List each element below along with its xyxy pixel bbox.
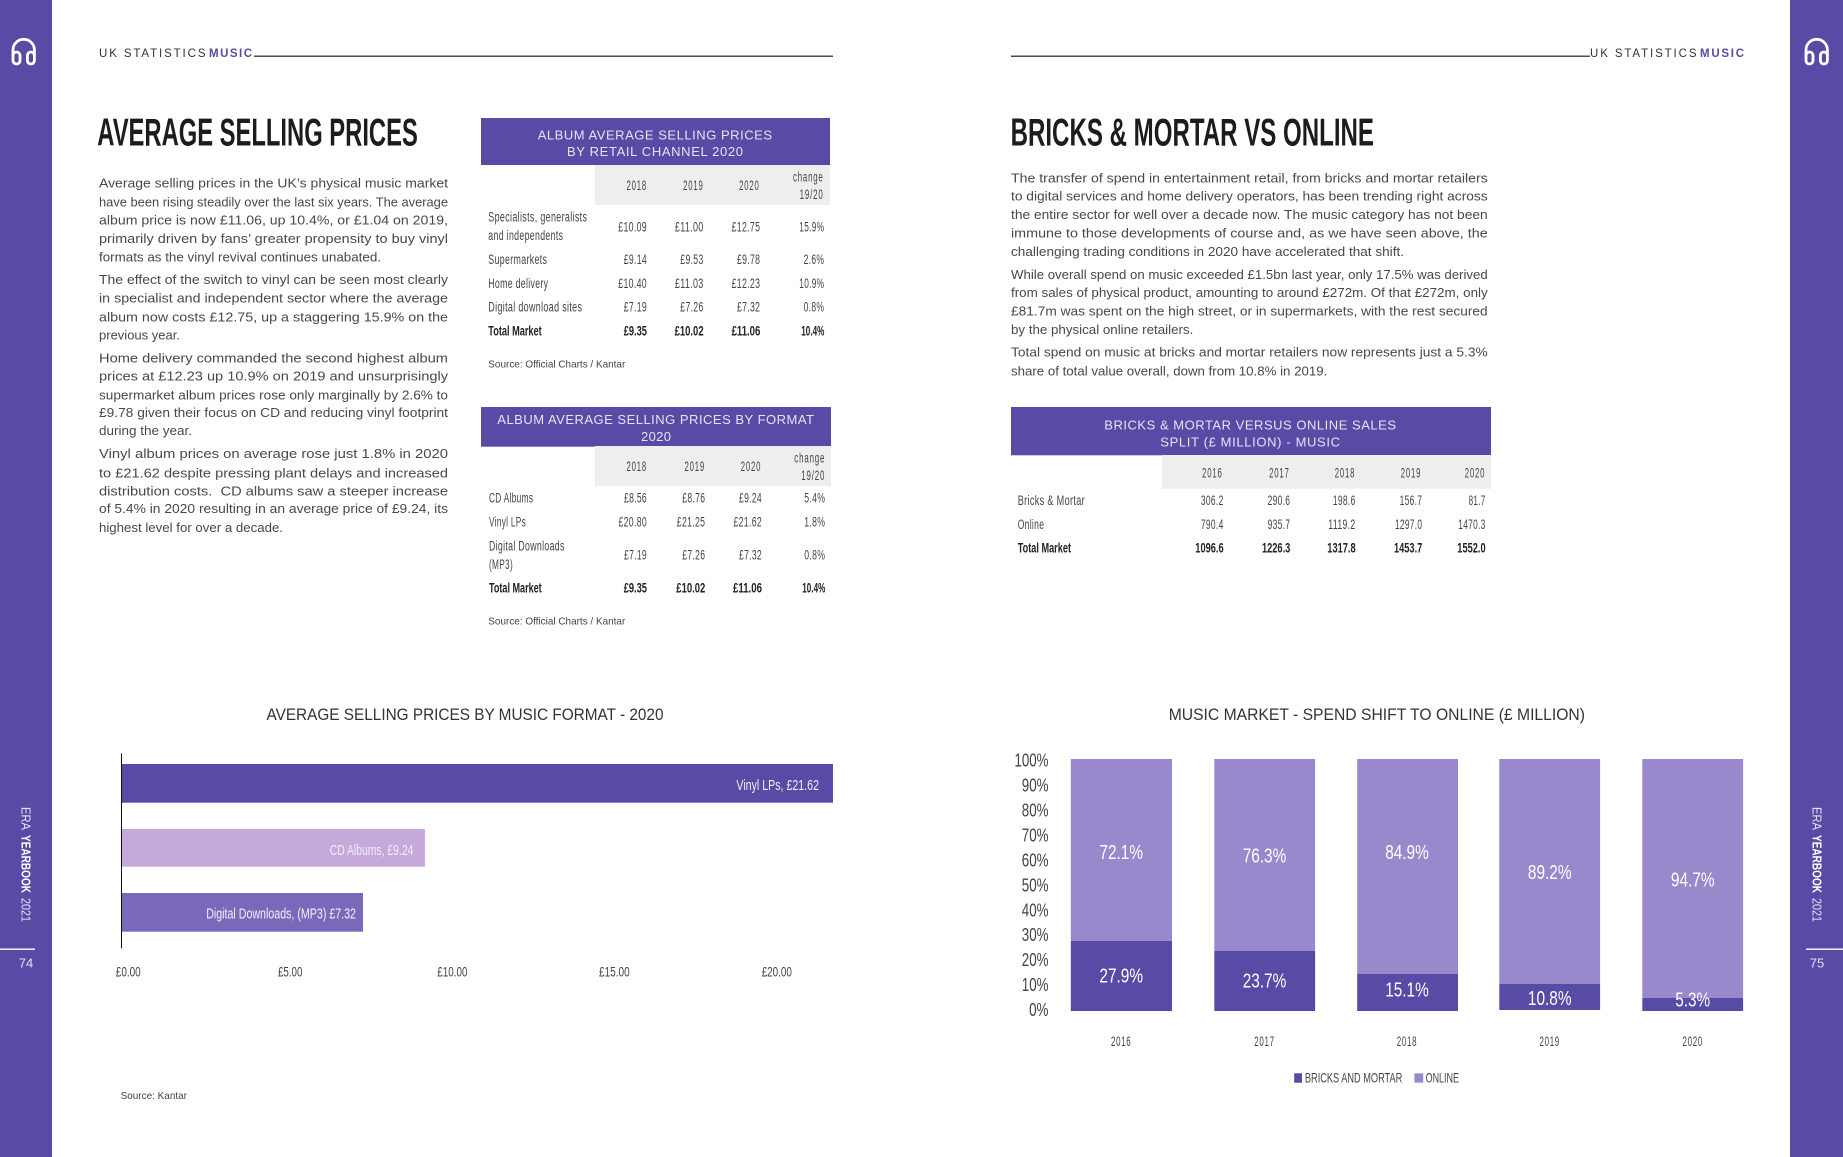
text block: bricks and mortar body: by the physical online retailers. <box>1011 323 1193 337</box>
text block: average selling prices body: previous year. <box>99 328 180 342</box>
column: 2016: 72.1% <box>1099 842 1143 864</box>
row: total market: 1453.7 <box>1394 541 1422 556</box>
text block: average selling prices body: album now costs £12.75, up a staggering 15.9% on the <box>99 310 448 324</box>
running header left: MUSIC <box>209 48 252 60</box>
row: supermarkets: Supermarkets <box>488 252 547 267</box>
row: total market: £10.02 <box>675 323 704 338</box>
page number 74: 74 <box>19 955 33 970</box>
icon: headphones left <box>13 39 34 64</box>
running header left: UK STATISTICS <box>99 48 206 60</box>
row: specialists <box>488 210 824 243</box>
column: 2018: 2018 <box>1397 1033 1417 1049</box>
row: specialists: Specialists, generalists <box>488 210 587 225</box>
row: supermarkets: £9.78 <box>737 252 760 267</box>
bar: CD albums: CD Albums, £9.24 <box>330 843 413 859</box>
column: 2019: 89.2% <box>1528 862 1572 884</box>
column: 2019: 2019 <box>1540 1033 1560 1049</box>
row: vinyl LPs: £20.80 <box>618 515 647 530</box>
row: specialists: £11.00 <box>675 220 704 235</box>
y axis labels: 70% <box>1022 824 1048 846</box>
text block: bricks and mortar body <box>1011 172 1488 379</box>
column: 2019: 10.8% <box>1528 988 1572 1010</box>
row: bricks and mortar: 81.7 <box>1469 493 1486 508</box>
text block: average selling prices body: in specialist and independent sector where the average <box>99 292 448 306</box>
row: digital download sites: £7.19 <box>624 300 647 315</box>
row: digital downloads <box>489 539 825 572</box>
text block: average selling prices body: prices at £12.23 up 10.9% on 2019 and unsurprisingly <box>99 369 449 383</box>
row: digital download sites: £7.32 <box>737 300 760 315</box>
legend: ONLINE <box>1426 1070 1459 1086</box>
table header row: 2020 <box>739 178 760 193</box>
table header row: 2019 <box>684 459 705 474</box>
row: specialists: £12.75 <box>732 220 760 235</box>
running header right: MUSIC <box>1700 48 1744 60</box>
sidebar label: ERA Yearbook 2021: 2021 <box>18 898 34 922</box>
row: digital downloads: £7.26 <box>682 547 705 562</box>
sidebar label: ERA Yearbook 2021: ERA <box>18 807 34 830</box>
panel: right sidebar <box>1790 0 1843 1157</box>
y axis labels: 20% <box>1022 949 1048 970</box>
row: CD albums <box>489 491 825 506</box>
text block: average selling prices body: album price is now £11.06, up 10.4%, or £1.04 on 2019, <box>99 213 448 227</box>
text block: average selling prices body: supermarket album prices rose only marginally by 2.6% to <box>99 388 448 402</box>
heading: bricks and mortar vs online: BRICKS & MORTAR VS ONLINE <box>1011 112 1374 155</box>
bar: digital downloads <box>122 893 363 932</box>
y axis labels <box>1014 750 1048 1020</box>
text block: average selling prices body: The effect of the switch to vinyl can be seen most clearly <box>99 273 449 287</box>
column: 2020 <box>1642 759 1743 1049</box>
x axis labels: £15.00 <box>599 964 630 980</box>
row: home delivery: 10.9% <box>799 276 824 291</box>
text block: bricks and mortar body: While overall spend on music exceeded £1.5bn last year, only 17.5% was derived <box>1011 268 1488 282</box>
text block: bricks and mortar body: challenging trading conditions in 2020 have accelerated that shift. <box>1011 245 1404 259</box>
text block: average selling prices body: £9.78 given their focus on CD and reducing vinyl footprint <box>99 406 449 420</box>
panel: table retail channel <box>481 118 830 371</box>
column: 2018: 15.1% <box>1385 980 1429 1002</box>
column: 2017: 2017 <box>1254 1033 1275 1049</box>
row: total market: £11.06 <box>732 323 761 338</box>
text block: average selling prices body <box>99 176 449 535</box>
row: total market: Total Market <box>489 580 542 595</box>
table heading <box>1104 417 1396 449</box>
sidebar label: ERA Yearbook 2021 right: YEARBOOK <box>1810 835 1824 893</box>
column: 2020: 94.7% <box>1671 870 1715 892</box>
table heading: BRICKS & MORTAR VERSUS ONLINE SALES <box>1104 417 1396 432</box>
row: bricks and mortar <box>1018 493 1486 508</box>
row: total market: 10.4% <box>802 580 825 595</box>
table header row: change <box>794 451 825 466</box>
row: digital downloads: £7.32 <box>739 547 762 562</box>
row: bricks and mortar: 156.7 <box>1400 493 1422 508</box>
panel: table format <box>481 407 831 627</box>
source note: Source: Kantar <box>121 1090 187 1102</box>
chart: music market spend shift to online <box>1014 705 1743 1086</box>
row: CD albums: £8.56 <box>624 491 647 506</box>
text block: average selling prices body: have been rising steadily over the last six years. The average <box>99 195 448 209</box>
table heading: SPLIT (£ MILLION) - MUSIC <box>1160 434 1340 449</box>
panel: table bricks and mortar versus online <box>1011 407 1491 556</box>
row: supermarkets: £9.53 <box>680 252 704 267</box>
sidebar label: ERA Yearbook 2021 right <box>1810 807 1824 922</box>
row: total market: 1552.0 <box>1457 541 1486 556</box>
table header row: 19/20 <box>801 468 825 483</box>
text block: bricks and mortar body: Total spend on music at bricks and mortar retailers now represents just a 5.3% <box>1011 346 1488 360</box>
column: 2017 <box>1214 759 1315 1049</box>
sidebar label: ERA Yearbook 2021: YEARBOOK <box>18 835 34 893</box>
row: total market: Total Market <box>1018 541 1071 556</box>
y axis labels: 50% <box>1022 874 1048 895</box>
row: specialists: and independents <box>488 228 563 243</box>
table header row <box>1202 465 1485 480</box>
y axis labels: 30% <box>1022 924 1048 945</box>
row: supermarkets: £9.14 <box>624 252 647 267</box>
text block: bricks and mortar body: from sales of physical product, amounting to around £272m. Of that £272m, only <box>1011 286 1488 300</box>
row: vinyl LPs: £21.25 <box>677 515 705 530</box>
page number 75: 75 <box>1810 955 1824 970</box>
row: vinyl LPs <box>489 515 825 530</box>
row: home delivery: Home delivery <box>488 276 548 291</box>
row: digital downloads: £7.19 <box>624 547 647 562</box>
x axis labels: £5.00 <box>278 964 303 980</box>
chart: average selling prices by music format <box>116 705 833 1102</box>
row: CD albums: £8.76 <box>682 491 705 506</box>
row: specialists: £10.09 <box>618 220 647 235</box>
y axis labels: 90% <box>1022 775 1048 796</box>
column: 2016: 27.9% <box>1099 966 1143 988</box>
text block: average selling prices body: Vinyl album prices on average rose just 1.8% in 2020 <box>99 447 448 461</box>
row: home delivery: £10.40 <box>618 276 647 291</box>
x axis labels <box>116 964 792 980</box>
table header row: 2019 <box>1401 465 1421 480</box>
row: vinyl LPs: Vinyl LPs <box>489 515 526 530</box>
row: bricks and mortar: Bricks & Mortar <box>1018 493 1085 508</box>
table header row: 2016 <box>1202 465 1223 480</box>
row: total market: 1317.8 <box>1327 541 1356 556</box>
row: bricks and mortar: 306.2 <box>1201 493 1224 508</box>
row: total market: 1096.6 <box>1195 541 1224 556</box>
sidebar label: ERA Yearbook 2021 <box>18 807 34 922</box>
bar: vinyl LPs: Vinyl LPs, £21.62 <box>736 778 819 794</box>
running header right <box>1011 48 1744 60</box>
x axis labels: £0.00 <box>116 964 141 980</box>
column: 2020: 5.3% <box>1675 990 1710 1012</box>
column: 2018 <box>1357 759 1458 1049</box>
table header row: 2020 <box>741 459 761 474</box>
running header left <box>99 48 833 60</box>
row: total market: £9.35 <box>624 580 647 595</box>
icon: headphones right <box>1806 39 1827 64</box>
row: online: 1119.2 <box>1328 517 1356 532</box>
text block: bricks and mortar body: The transfer of spend in entertainment retail, from bricks and mortar retailers <box>1011 172 1488 186</box>
text block: bricks and mortar body: share of total value overall, down from 10.8% in 2019. <box>1011 365 1327 379</box>
text block: bricks and mortar body: £81.7m was spent on the high street, or in supermarkets, with the rest secured <box>1011 305 1488 319</box>
text block: average selling prices body: highest level for over a decade. <box>99 521 283 535</box>
row: home delivery: £12.23 <box>732 276 760 291</box>
table header row: 2018 <box>626 178 647 193</box>
source note: Source: Official Charts / Kantar <box>488 359 626 371</box>
row: online: Online <box>1018 517 1044 532</box>
table header row: 2018 <box>626 459 647 474</box>
row: supermarkets: 2.6% <box>804 252 824 267</box>
row: total market <box>1018 541 1486 556</box>
row: digital download sites: 0.8% <box>804 300 824 315</box>
bar: vinyl LPs <box>122 764 833 803</box>
bar: CD albums <box>122 829 425 867</box>
row: digital downloads: 0.8% <box>804 547 825 562</box>
row: specialists: 15.9% <box>799 220 824 235</box>
text block: bricks and mortar body: to digital services and home delivery operators, has been trending right across <box>1011 190 1488 204</box>
panel: left sidebar <box>0 0 52 1157</box>
row: digital download sites: Digital download sites <box>488 300 582 315</box>
row: home delivery <box>488 276 824 291</box>
sidebar label: ERA Yearbook 2021 right: ERA <box>1810 807 1824 830</box>
column: 2017: 23.7% <box>1243 971 1286 993</box>
row: total market: 1226.3 <box>1262 541 1291 556</box>
table header row: 2020 <box>1465 465 1485 480</box>
row: total market: £9.35 <box>624 323 647 338</box>
row: supermarkets <box>488 252 824 267</box>
text block: average selling prices body: Average selling prices in the UK’s physical music market <box>99 176 449 190</box>
row: CD albums: £9.24 <box>739 491 762 506</box>
text block: average selling prices body: Home delivery commanded the second highest album <box>99 352 448 366</box>
row: total market: Total Market <box>488 323 542 338</box>
row: digital downloads: (MP3) <box>489 557 513 572</box>
table header row: 2019 <box>683 178 704 193</box>
row: vinyl LPs: 1.8% <box>804 515 825 530</box>
row: CD albums: CD Albums <box>489 491 533 506</box>
row: total market <box>488 323 824 338</box>
column: 2017: 76.3% <box>1243 846 1286 868</box>
column: 2018: 84.9% <box>1385 842 1429 864</box>
source note: Source: Official Charts / Kantar <box>488 615 626 627</box>
x axis labels: £10.00 <box>437 964 468 980</box>
heading: average selling prices: AVERAGE SELLING PRICES <box>97 112 418 155</box>
sidebar label: ERA Yearbook 2021 right: 2021 <box>1810 898 1824 922</box>
column: 2019 <box>1499 759 1600 1049</box>
running header right: UK STATISTICS <box>1590 48 1697 60</box>
legend: BRICKS AND MORTAR <box>1305 1070 1402 1086</box>
row: total market <box>489 580 825 595</box>
table header row: change <box>793 170 824 185</box>
column: 2016: 2016 <box>1111 1033 1131 1049</box>
row: digital download sites: £7.26 <box>680 300 704 315</box>
table heading: format <box>497 412 814 444</box>
y axis labels: 0% <box>1029 999 1048 1020</box>
y axis labels: 10% <box>1022 974 1048 995</box>
row: total market: £10.02 <box>676 580 705 595</box>
table heading: retail channel: BY RETAIL CHANNEL 2020 <box>567 144 743 159</box>
row: online: 935.7 <box>1268 517 1290 532</box>
chart title: MUSIC MARKET - SPEND SHIFT TO ONLINE (£ MILLION) <box>1169 705 1585 724</box>
text block: bricks and mortar body: the entire sector for well over a decade now. The music category has not been <box>1011 208 1488 222</box>
row: digital download sites <box>488 300 824 315</box>
y axis labels: 40% <box>1022 899 1048 920</box>
text block: average selling prices body: to £21.62 despite pressing plant delays and increased <box>99 466 448 480</box>
row: online: 1297.0 <box>1395 517 1422 532</box>
table heading: retail channel: ALBUM AVERAGE SELLING PRICES <box>538 127 772 142</box>
row: bricks and mortar: 198.6 <box>1333 493 1356 508</box>
text block: average selling prices body: during the year. <box>99 424 192 438</box>
row: home delivery: £11.03 <box>675 276 704 291</box>
table heading: format: ALBUM AVERAGE SELLING PRICES BY FORMAT <box>497 412 814 427</box>
y axis labels: 60% <box>1022 849 1048 870</box>
x axis labels: £20.00 <box>762 964 792 980</box>
y axis labels: 80% <box>1022 800 1048 821</box>
row: CD albums: 5.4% <box>804 491 825 506</box>
text block: average selling prices body: primarily driven by fans’ greater propensity to buy vinyl <box>99 232 448 246</box>
row: online: 1470.3 <box>1458 517 1486 532</box>
row: vinyl LPs: £21.62 <box>734 515 762 530</box>
table heading: retail channel <box>538 127 772 159</box>
row: bricks and mortar: 290.6 <box>1268 493 1290 508</box>
table heading: format: 2020 <box>641 429 671 444</box>
y axis labels: 100% <box>1014 750 1048 771</box>
table header row: 2017 <box>1269 465 1290 480</box>
text block: bricks and mortar body: immune to those developments of course and, as we have seen above, the <box>1011 227 1488 241</box>
row: online <box>1018 517 1486 532</box>
chart title: AVERAGE SELLING PRICES BY MUSIC FORMAT - 2020 <box>266 705 664 724</box>
text block: average selling prices body: of 5.4% in 2020 resulting in an average price of £9.24, its <box>99 502 448 516</box>
table header row: 19/20 <box>800 187 824 202</box>
row: online: 790.4 <box>1201 517 1224 532</box>
text block: average selling prices body: formats as the vinyl revival continues unabated. <box>99 250 381 264</box>
text block: average selling prices body: distribution costs. CD albums saw a steeper increase <box>99 484 448 498</box>
column: 2016 <box>1071 759 1172 1049</box>
row: digital downloads: Digital Downloads <box>489 539 565 554</box>
table header row <box>626 170 824 202</box>
column: 2020: 2020 <box>1682 1033 1703 1049</box>
row: total market: 10.4% <box>801 323 824 338</box>
table header row <box>626 451 825 483</box>
row: total market: £11.06 <box>733 580 762 595</box>
table header row: 2018 <box>1335 465 1355 480</box>
bar: digital downloads: Digital Downloads, (MP3) £7.32 <box>206 906 356 922</box>
